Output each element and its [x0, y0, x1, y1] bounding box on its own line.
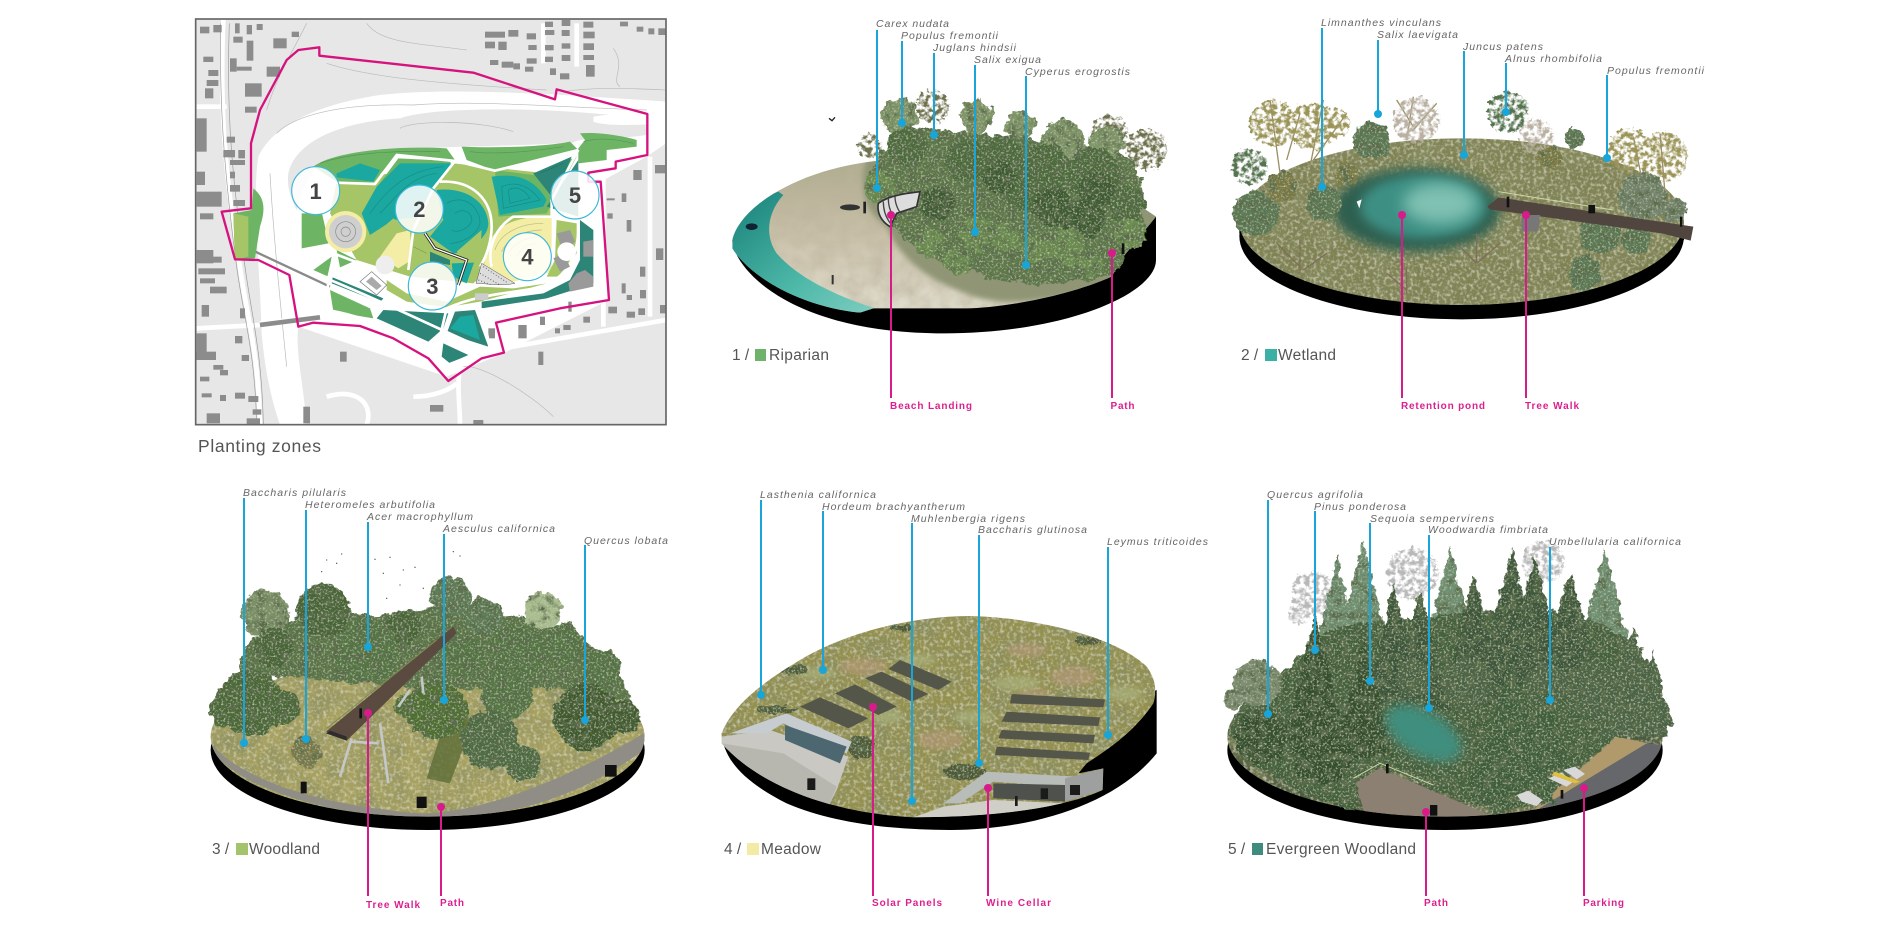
species: Juglans hindsii: Juglans hindsii [932, 42, 1017, 54]
species: Baccharis glutinosa: Baccharis glutinosa [978, 524, 1087, 536]
species: Baccharis pilularis [240, 487, 347, 747]
caption: 2 Wetland [1241, 347, 1336, 364]
paths and structures [323, 150, 593, 367]
illustration: evergreen woodland landscape [1224, 540, 1672, 830]
species: Carex nudata [873, 18, 949, 192]
feature: Retention pond [1398, 211, 1485, 412]
feature: Path: Path [440, 898, 464, 909]
species: Umbellularia californica [1546, 536, 1681, 704]
zone marker 3 [408, 262, 456, 310]
species: Hordeum brachyantherum [819, 501, 965, 674]
species: Juncus patens [1460, 41, 1544, 159]
species: Cyperus erogrostis: Cyperus erogrostis [1025, 66, 1131, 78]
caption: 1 Riparian: 1 / [732, 347, 750, 364]
caption: 3 Woodland: 3 / [212, 841, 230, 858]
feature: Retention pond: Retention pond [1401, 401, 1485, 412]
species: Leymus triticoides: Leymus triticoides [1107, 536, 1209, 548]
species: Aesculus californica [440, 523, 555, 704]
species: Juglans hindsii [930, 42, 1017, 139]
panel: meadow disc [718, 489, 1209, 909]
feature: Wine Cellar: Wine Cellar [986, 898, 1051, 909]
species: Populus fremontii [1603, 65, 1705, 162]
surrounding buildings [197, 20, 666, 425]
caption: 3 Woodland: Woodland [249, 841, 320, 858]
feature: Tree Walk: Tree Walk [366, 900, 420, 911]
caption: 1 Riparian [732, 347, 829, 364]
zone marker 1 [292, 167, 340, 215]
species: Limnanthes vinculans: Limnanthes vinculans [1321, 17, 1442, 29]
feature: Parking: Parking [1583, 898, 1624, 909]
feature: Path [1422, 808, 1448, 909]
species: Salix exigua: Salix exigua [974, 54, 1041, 66]
illustration: meadow landscape [718, 613, 1160, 830]
species: Muhlenbergia rigens [908, 513, 1026, 805]
feature: Path: Path [1110, 401, 1134, 412]
caption: 5 Evergreen Woodland: 5 / [1228, 841, 1246, 858]
species: Lasthenia californica [757, 489, 876, 699]
feature: Parking [1580, 784, 1624, 909]
species: Alnus rhombifolia [1502, 53, 1602, 116]
panel: wetland disc [1232, 17, 1705, 412]
caption: 3 Woodland [212, 841, 320, 858]
feature: Tree Walk [364, 709, 420, 911]
feature: Solar Panels: Solar Panels [872, 898, 942, 909]
species: Umbellularia californica: Umbellularia californica [1549, 536, 1681, 548]
species: Pinus ponderosa: Pinus ponderosa [1314, 501, 1406, 513]
feature: Tree Walk [1522, 211, 1579, 412]
zone marker 2 [395, 185, 443, 233]
species: Lasthenia californica: Lasthenia californica [760, 489, 876, 501]
species: Quercus agrifolia [1264, 489, 1363, 718]
caption: 4 Meadow: 4 / [724, 841, 742, 858]
feature: Path: Path [1424, 898, 1448, 909]
species: Alnus rhombifolia: Alnus rhombifolia [1504, 53, 1602, 65]
illustration: wetland landscape [1232, 91, 1693, 319]
species: Juncus patens: Juncus patens [1462, 41, 1544, 53]
feature: Tree Walk: Tree Walk [1525, 401, 1579, 412]
feature: Solar Panels [869, 703, 942, 909]
caption: 4 Meadow: Meadow [761, 841, 822, 858]
species: Aesculus californica: Aesculus californica [442, 523, 555, 535]
species: Carex nudata: Carex nudata [876, 18, 949, 30]
feature: Wine Cellar [984, 784, 1051, 909]
feature: Beach Landing [887, 211, 972, 412]
species: Acer macrophyllum [364, 511, 473, 651]
species: Quercus agrifolia: Quercus agrifolia [1267, 489, 1363, 501]
zone marker 2: 2 [413, 197, 425, 222]
species: Limnanthes vinculans [1318, 17, 1442, 191]
illustration: woodland landscape [208, 551, 648, 830]
heading: planting zones: Planting zones [198, 436, 321, 456]
species: Salix exigua [971, 54, 1041, 236]
species: Quercus lobata: Quercus lobata [584, 535, 668, 547]
zone marker 4: 4 [521, 245, 534, 270]
species: Hordeum brachyantherum: Hordeum brachyantherum [822, 501, 965, 513]
species: Populus fremontii: Populus fremontii [901, 30, 999, 42]
panel: woodland disc [208, 487, 668, 911]
species: Baccharis glutinosa [975, 524, 1087, 767]
species: Populus fremontii [898, 30, 999, 127]
caption: 5 Evergreen Woodland: Evergreen Woodland [1266, 841, 1416, 858]
map base [196, 19, 666, 425]
caption: 2 Wetland: Wetland [1278, 347, 1336, 364]
illustration: riparian landscape [730, 90, 1167, 333]
panel: planting zones site map [196, 19, 666, 425]
feature: Beach Landing: Beach Landing [890, 401, 972, 412]
species: Baccharis pilularis: Baccharis pilularis [243, 487, 347, 499]
zone marker 5: 5 [569, 183, 581, 208]
zone marker 3: 3 [426, 274, 438, 299]
zone marker 5 [551, 171, 599, 219]
caption: 1 Riparian: Riparian [769, 347, 829, 364]
map frame [196, 19, 666, 425]
species: Leymus triticoides [1104, 536, 1209, 739]
boundary line [222, 47, 647, 381]
species: Salix laevigata: Salix laevigata [1377, 29, 1458, 41]
species: Sequoia sempervirens [1366, 513, 1495, 685]
species: Salix laevigata [1374, 29, 1458, 118]
caption: 4 Meadow [724, 841, 822, 858]
zone marker 4 [503, 233, 551, 281]
species: Woodwardia fimbriata [1425, 524, 1548, 712]
species: Heteromeles arbutifolia [302, 499, 435, 743]
species: Populus fremontii: Populus fremontii [1607, 65, 1705, 77]
species: Acer macrophyllum: Acer macrophyllum [366, 511, 473, 523]
caption: 2 Wetland: 2 / [1241, 347, 1259, 364]
species: Muhlenbergia rigens: Muhlenbergia rigens [911, 513, 1026, 525]
species: Cyperus erogrostis [1022, 66, 1131, 269]
species: Sequoia sempervirens: Sequoia sempervirens [1370, 513, 1495, 525]
species: Heteromeles arbutifolia: Heteromeles arbutifolia [305, 499, 435, 511]
panel: riparian disc [730, 18, 1167, 412]
feature: Path [437, 803, 464, 909]
zone marker 1: 1 [310, 179, 322, 204]
panel: evergreen woodland disc [1224, 489, 1681, 909]
feature: Path [1108, 249, 1134, 412]
species: Pinus ponderosa [1311, 501, 1406, 654]
species: Quercus lobata [581, 535, 668, 724]
species: Woodwardia fimbriata: Woodwardia fimbriata [1428, 524, 1548, 536]
planting zones colour [233, 133, 637, 363]
